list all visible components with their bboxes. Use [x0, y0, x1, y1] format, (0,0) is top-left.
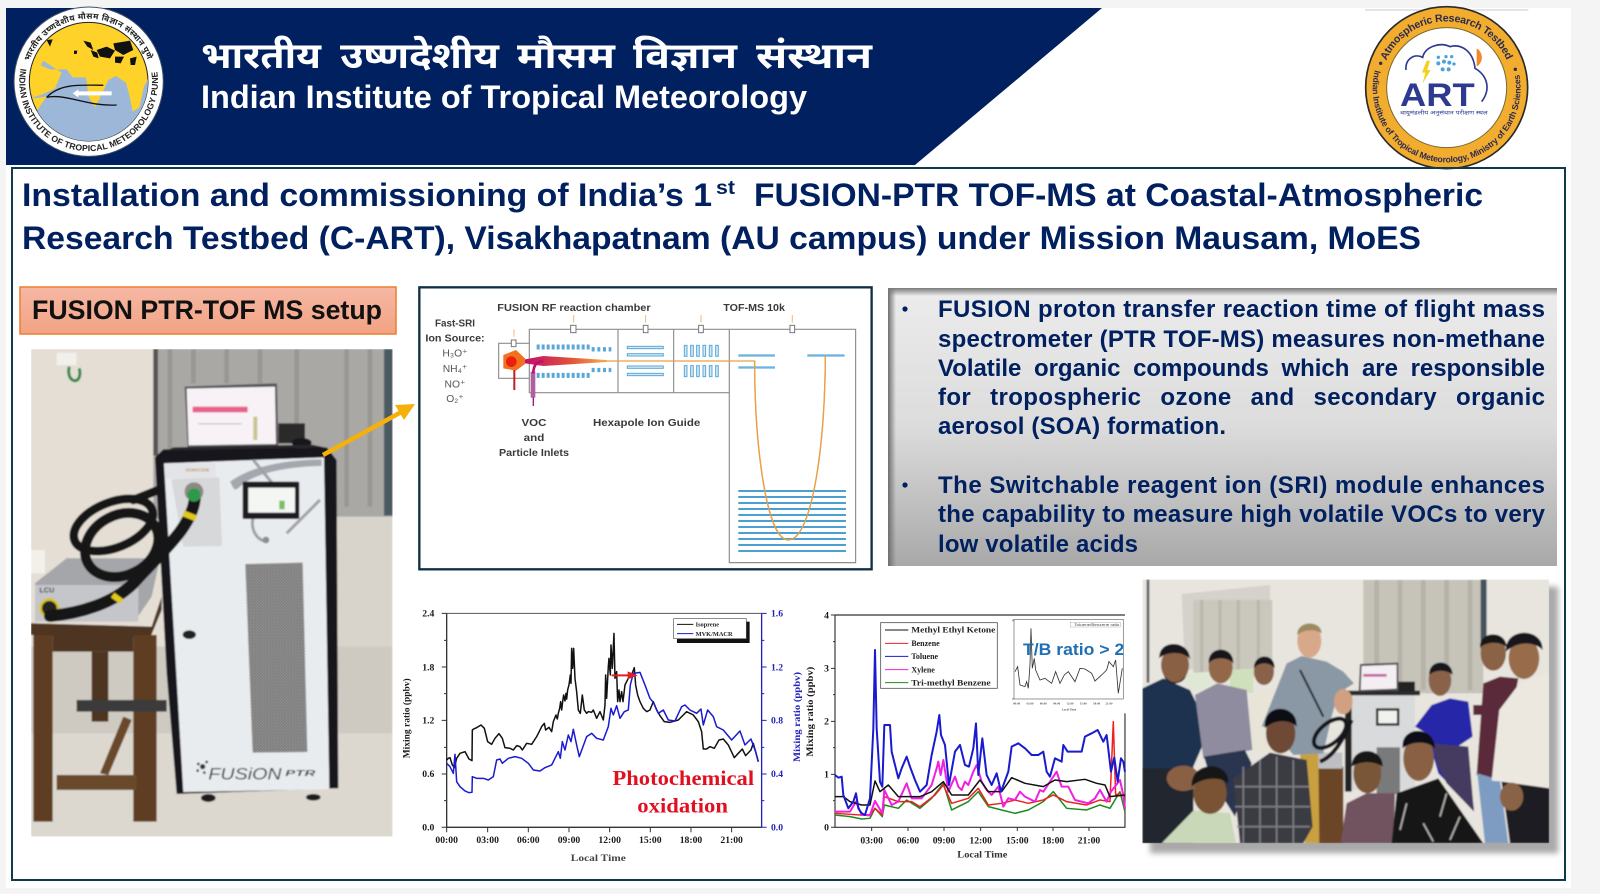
MVK/MACR line — [447, 672, 758, 793]
title — [22, 177, 1483, 256]
red arrow — [612, 671, 638, 679]
chart: isoprene and MVK/MACR diurnal: 0.8 — [771, 716, 783, 727]
setup label — [20, 287, 396, 334]
photo: team group — [1142, 579, 1558, 853]
green series — [835, 783, 1125, 819]
chart: aromatics and MEK diurnal: 18:00 — [1042, 836, 1064, 847]
chart: isoprene and MVK/MACR diurnal: 00:00 — [435, 835, 458, 846]
text panel: instrument description — [888, 288, 1557, 566]
title: Installation and commissioning of India’s 1 — [22, 177, 712, 213]
person 2 — [1195, 683, 1252, 758]
text panel: instrument description: The Switchable reagent ion (SRI) module enhances — [938, 472, 1545, 499]
text panel: instrument description: low volatile acids — [938, 531, 1138, 558]
LCU box — [35, 558, 160, 622]
axes — [447, 613, 762, 827]
chart: aromatics and MEK diurnal: 4 — [824, 610, 829, 621]
icon: IITM logo: INDIAN INSTITUTE OF TROPICAL METEOROLOGY PUNE — [19, 68, 158, 152]
schematic: FUSION PTR-TOF diagram — [419, 287, 872, 569]
axes — [835, 615, 1125, 827]
inset: T/B ratio — [1010, 618, 1125, 713]
inset: T/B ratio: 00:00 — [1013, 701, 1021, 705]
chart: isoprene and MVK/MACR diurnal: 1.8 — [422, 662, 434, 673]
legend: Toluene — [911, 652, 939, 661]
blue series — [835, 650, 1125, 815]
inset: T/B ratio: 12:00 — [1066, 701, 1074, 705]
text panel: instrument description: aerosol (SOA) formation. — [938, 413, 1226, 440]
seated front left — [1162, 811, 1236, 843]
black series — [835, 778, 1125, 805]
chart: isoprene and MVK/MACR diurnal: 15:00 — [639, 835, 662, 846]
title: st — [716, 178, 736, 199]
chart: isoprene and MVK/MACR diurnal: 0.6 — [422, 769, 434, 780]
legend: Xylene — [911, 665, 935, 674]
person 3 — [1254, 658, 1274, 685]
diagram labels: O₂⁺ — [446, 394, 464, 405]
chart: aromatics and MEK diurnal: 09:00 — [933, 836, 955, 847]
chart: isoprene and MVK/MACR diurnal: 0.4 — [771, 769, 783, 780]
chart: isoprene and MVK/MACR diurnal: Local Time — [571, 853, 626, 863]
inset: T/B ratio: 03:00 — [1026, 701, 1034, 705]
inset: T/B ratio: T/B ratio > 2 — [1023, 640, 1124, 659]
chart: isoprene and MVK/MACR diurnal: 2.4 — [422, 609, 434, 620]
chart: aromatics and MEK diurnal: 03:00 — [860, 836, 883, 847]
seated plaid — [1233, 753, 1313, 843]
chart: aromatics and MEK diurnal — [805, 610, 1125, 859]
ion source — [503, 350, 525, 371]
reflectron plates — [738, 490, 846, 552]
chart: isoprene and MVK/MACR diurnal: 12:00 — [598, 835, 621, 846]
inset: T/B ratio: 18:00 — [1093, 701, 1101, 705]
white shirt person — [1490, 686, 1518, 782]
inset: T/B ratio: 21:00 — [1105, 701, 1113, 705]
tall person — [1300, 750, 1319, 843]
chart: aromatics and MEK diurnal: 21:00 — [1078, 836, 1100, 847]
title: FUSION-PTR TOF-MS at Coastal-Atmospheric — [754, 177, 1483, 213]
inset: T/B ratio: 8 — [1012, 620, 1014, 623]
header English name: Indian Institute of Tropical Meteorology — [201, 79, 807, 115]
text panel: instrument description: Volatile organic compounds which are responsible — [938, 355, 1545, 382]
cabinet and laptop — [1347, 693, 1415, 790]
chart: isoprene and MVK/MACR diurnal: oxidation — [637, 795, 729, 817]
setup label: FUSION PTR-TOF MS setup — [32, 295, 382, 325]
seated glasses — [1341, 793, 1395, 843]
legend — [881, 623, 997, 688]
legend — [674, 619, 750, 643]
header Hindi name: उष्णदेशीय — [340, 34, 500, 76]
legend: MVK/MACR — [696, 631, 733, 638]
text panel: instrument description: FUSION proton transfer reaction time of flight mass — [938, 296, 1545, 323]
photo: FUSION PTR instrument: PTR — [285, 768, 317, 778]
chart: isoprene and MVK/MACR diurnal — [402, 609, 802, 863]
chamber outlines — [529, 329, 856, 563]
hexapole rods — [537, 347, 611, 375]
chart: isoprene and MVK/MACR diurnal: 1.2 — [422, 716, 434, 727]
chart: isoprene and MVK/MACR diurnal: 09:00 — [558, 835, 580, 846]
magenta series — [835, 760, 1125, 815]
diagram labels: TOF-MS 10k — [723, 303, 785, 314]
legend: Benzene — [911, 639, 940, 648]
icon: ART logo — [1364, 6, 1528, 170]
photo: FUSION PTR instrument: FUSiON — [208, 764, 283, 783]
chart: isoprene and MVK/MACR diurnal: Mixing ratio (ppbv) — [792, 672, 802, 762]
icon: ART logo: Atmospheric Research Testbed — [1381, 14, 1514, 60]
table — [31, 597, 162, 638]
black shirt — [1392, 778, 1483, 843]
chart: aromatics and MEK diurnal: 0 — [824, 823, 829, 834]
chart: isoprene and MVK/MACR diurnal: 1.6 — [771, 609, 783, 620]
legend: Isoprene — [696, 622, 719, 629]
diagram labels — [425, 303, 785, 459]
chart: aromatics and MEK diurnal: 2 — [824, 717, 829, 728]
main frame — [12, 168, 1565, 880]
photo: FUSION PTR instrument — [31, 349, 393, 837]
diagram labels: Particle Inlets — [499, 448, 569, 459]
person 1 — [1142, 678, 1209, 843]
chart: aromatics and MEK diurnal: 3 — [824, 664, 829, 675]
header Hindi name: भारतीय — [201, 35, 322, 76]
chart: isoprene and MVK/MACR diurnal: 0.0 — [422, 822, 434, 833]
chart: isoprene and MVK/MACR diurnal: 21:00 — [720, 835, 743, 846]
arrow: photo to schematic — [323, 404, 415, 455]
legend: Tri-methyl Benzene — [911, 678, 991, 687]
photo: FUSION PTR instrument: LCU — [39, 586, 54, 595]
hoses — [1309, 713, 1352, 762]
inset: T/B ratio: 0 — [1012, 698, 1014, 701]
diagram labels: NO⁺ — [445, 379, 465, 390]
chart: aromatics and MEK diurnal: 15:00 — [1006, 836, 1029, 847]
icon: ART logo: ART — [1400, 77, 1475, 113]
diagram labels: H₃O⁺ — [442, 349, 468, 360]
chart: isoprene and MVK/MACR diurnal: 18:00 — [680, 835, 702, 846]
header Hindi name — [201, 34, 873, 76]
diagram labels: and — [524, 433, 544, 444]
chart: aromatics and MEK diurnal: 12:00 — [969, 836, 992, 847]
hoses — [50, 488, 195, 616]
chart: isoprene and MVK/MACR diurnal: 1.2 — [771, 662, 783, 673]
chart: isoprene and MVK/MACR diurnal: 06:00 — [517, 835, 540, 846]
photo: FUSION PTR instrument: IONICON — [186, 467, 209, 473]
maroon shirt person — [1477, 677, 1518, 780]
chart: aromatics and MEK diurnal: Local Time — [957, 849, 1007, 859]
chart: aromatics and MEK diurnal: 1 — [824, 770, 829, 781]
icon: IITM logo: भारतीय उष्णदेशीय मौसम विज्ञान संस्थान पुणे — [24, 12, 154, 60]
text panel: instrument description: spectrometer (PTR TOF-MS) measures non-methane — [938, 326, 1545, 353]
annotation: Photochemical — [612, 768, 754, 790]
diagram labels: FUSION RF reaction chamber — [497, 303, 651, 314]
title: Research Testbed (C-ART), Visakhapatnam (AU campus) under Mission Mausam, MoES — [22, 220, 1421, 256]
chart: isoprene and MVK/MACR diurnal: 03:00 — [476, 835, 499, 846]
diagram labels: NH₄⁺ — [443, 364, 467, 375]
chart: isoprene and MVK/MACR diurnal: 0.0 — [771, 822, 783, 833]
chart: aromatics and MEK diurnal: 06:00 — [897, 836, 919, 847]
chart: aromatics and MEK diurnal: Mixing ratio (ppbv) — [805, 667, 815, 757]
isoprene line — [447, 633, 758, 768]
diagram labels: Ion Source: — [425, 334, 485, 345]
inset: T/B ratio: 09:00 — [1053, 701, 1061, 705]
diagram labels: Hexapole Ion Guide — [593, 418, 701, 429]
chart: isoprene and MVK/MACR diurnal: Mixing ratio (ppbv) — [402, 678, 412, 758]
sari person — [1415, 698, 1474, 810]
header Hindi name: मौसम — [517, 35, 616, 76]
photo shadow — [1150, 587, 1558, 853]
laptop — [185, 383, 278, 447]
inset: T/B ratio: 15:00 — [1080, 701, 1087, 705]
inset: T/B ratio: Toluene/Benzene ratio — [1074, 623, 1119, 627]
header Hindi name: विज्ञान — [633, 35, 738, 76]
inlet — [531, 372, 535, 398]
diagram labels: VOC — [521, 418, 547, 429]
red series — [835, 722, 1125, 816]
text panel: instrument description: for tropospheric ozone and secondary organic — [938, 384, 1545, 411]
ion beam — [525, 356, 607, 366]
text panel: instrument description: the capability to measure high volatile VOCs to very — [938, 501, 1546, 528]
inset: T/B ratio: Local Time — [1062, 707, 1077, 711]
diagram labels: Fast-SRI — [435, 319, 475, 330]
header banner — [6, 8, 1102, 165]
icon: ART logo: Indian Institute of Tropical Meteorology, Ministry of Earth Sciences — [1372, 70, 1521, 163]
cabinet — [155, 447, 338, 794]
header Hindi name: संस्थान — [756, 35, 873, 76]
legend: Methyl Ethyl Ketone — [911, 626, 996, 635]
icon: IITM logo — [14, 6, 164, 157]
inset: T/B ratio: 06:00 — [1040, 701, 1047, 705]
icon: ART logo: वायुमंडलीय अनुसंधान परीक्षण स्थल — [1400, 109, 1488, 117]
